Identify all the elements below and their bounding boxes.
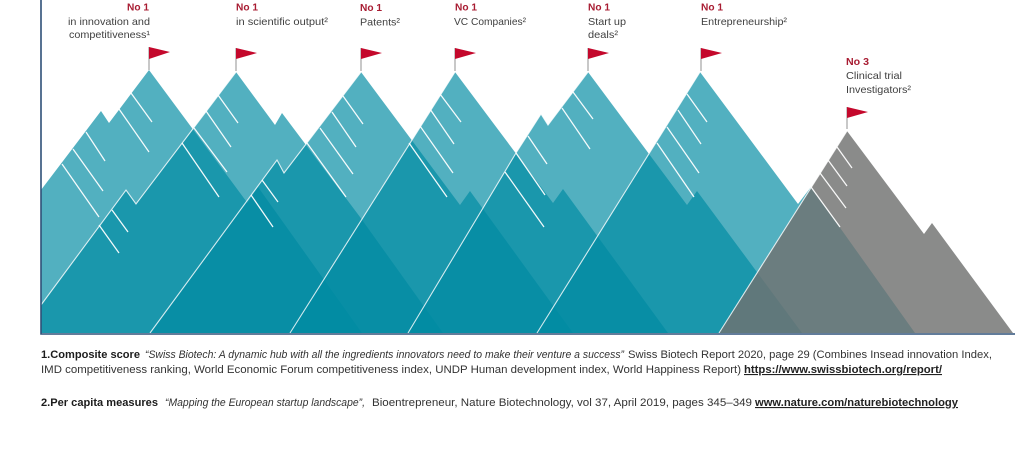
footnote 1: 1.Composite score: [41, 349, 140, 361]
label: No 3 clinical trial investigators: Investigators²: [846, 84, 912, 96]
footnote 2: Bioentrepreneur, Nature Biotechnology, vol 37, April 2019, pages 345–349: [372, 397, 752, 409]
label: No 1 entrepreneurship: No 1: [701, 2, 723, 14]
label: No 1 patents: No 1: [360, 2, 382, 14]
label: No 1 in scientific output: No 1: [236, 2, 258, 14]
label: No 1 start up deals: deals²: [588, 29, 619, 41]
label: No 1 VC companies: [454, 2, 526, 28]
chart axes: [41, 0, 1015, 334]
footnote 1: IMD competitiveness ranking, World Economic Forum competitiveness index, UNDP Human development index, World Happiness Report): [41, 364, 741, 376]
label: No 1 in scientific output: in scientific output²: [236, 16, 329, 28]
label: No 3 clinical trial investigators: No 3: [846, 56, 869, 68]
footnote 2: “Mapping the European startup landscape”,: [165, 397, 365, 409]
label: No 1 entrepreneurship: [701, 2, 788, 28]
flag 5: [588, 48, 609, 71]
footnote 2: www.nature.com/naturebiotechnology: [754, 397, 959, 409]
footnote 1: https://www.swissbiotech.org/report/: [744, 364, 942, 376]
flag 7: [847, 107, 868, 129]
mountain 1: innovation and competitiveness: [41, 70, 362, 333]
flag 3: [361, 48, 382, 71]
label: No 1 in scientific output: [236, 2, 329, 28]
label: No 1 patents: Patents²: [360, 16, 401, 28]
flag 6: [701, 48, 722, 71]
label: No 1 in innovation and competitiveness: No 1: [127, 2, 149, 14]
footnote 1: [41, 349, 992, 376]
mountain 2: scientific output: [41, 72, 443, 333]
mountain 5: start up deals: [408, 72, 802, 333]
label: No 1 entrepreneurship: Entrepreneurship²: [701, 16, 788, 28]
label: No 1 in innovation and competitiveness: competitiveness¹: [69, 29, 151, 41]
flag 1: [149, 47, 170, 70]
flag 2: [236, 48, 257, 71]
label: No 1 in innovation and competitiveness: [68, 2, 151, 41]
label: No 3 clinical trial investigators: Clinical trial: [846, 70, 902, 82]
label: No 1 start up deals: No 1: [588, 2, 610, 14]
label: No 1 VC companies: No 1: [455, 2, 477, 14]
footnote 1: “Swiss Biotech: A dynamic hub with all the ingredients innovators need to make their venture a success”: [145, 349, 625, 361]
ridge highlight strokes: [62, 92, 852, 253]
mountain 4: VC companies: [290, 72, 668, 333]
footnote 2: 2.Per capita measures: [41, 397, 158, 409]
mountain range chart: [41, 0, 1015, 334]
label: No 1 VC companies: VC Companies²: [454, 16, 526, 28]
label: No 1 start up deals: [588, 2, 626, 41]
mountain 6: entrepreneurship: [537, 72, 915, 333]
mountain 3: patents: [150, 72, 573, 333]
label: No 3 clinical trial investigators: [846, 56, 912, 96]
label: No 1 start up deals: Start up: [588, 16, 626, 28]
label: No 1 in innovation and competitiveness: in innovation and: [68, 16, 150, 28]
mountain 7: clinical trial investigators (grey): [719, 131, 1013, 333]
flag 4: [455, 48, 476, 71]
footnote 1: Swiss Biotech Report 2020, page 29 (Combines Insead innovation Index,: [628, 349, 992, 361]
label: No 1 patents: [360, 2, 401, 28]
footnote 2: [41, 397, 959, 409]
